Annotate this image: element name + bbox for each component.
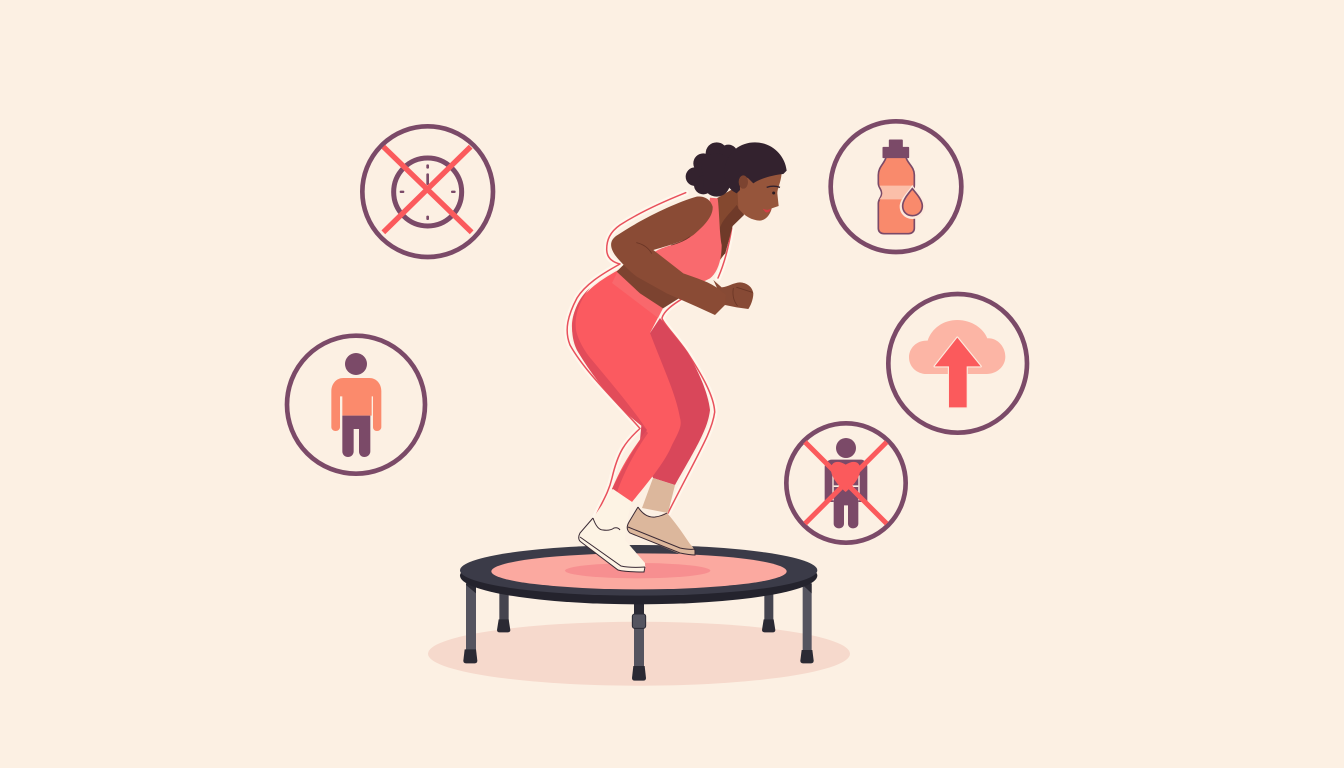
ear [739,175,748,189]
tan shoe [627,507,695,555]
mouth [763,209,771,213]
ring [287,336,425,474]
arm gaps [832,475,860,500]
clock ticks [400,164,456,220]
socks [593,478,675,540]
bun [686,142,738,197]
icon: person [287,336,425,474]
person [825,438,867,528]
clock face [394,158,462,226]
front leg pants [572,268,681,502]
water drop [900,185,925,219]
ring [786,423,906,543]
cloud [909,320,1005,374]
icon: no person [786,423,906,543]
trampoline [460,545,817,681]
up arrow [935,338,981,407]
torso highlight [831,462,860,492]
trousers [342,416,370,457]
waistband [612,268,663,318]
front legs [463,583,814,681]
cross [383,147,472,232]
crop top [655,198,722,285]
ring [888,294,1027,433]
frame rim [460,547,817,604]
icon: no clock [362,126,493,257]
face [737,173,782,221]
bottle cap [883,140,908,157]
eye and brow [767,186,780,194]
arm creases [637,237,752,306]
back leg pants [640,318,710,485]
icon: water bottle [831,121,961,252]
bottle body [878,157,914,234]
neck [717,187,745,260]
upper body in zoom coordinates [611,142,787,315]
neck shadow [719,205,744,257]
far fist [713,280,753,309]
ring [831,121,961,252]
icon: cloud with up arrow [888,294,1027,433]
ring [362,126,493,257]
back legs [497,590,775,632]
jump mat [491,553,787,589]
cross [805,442,887,524]
woman jumping [567,142,787,572]
arm [611,197,726,315]
motion outline [567,193,732,518]
white shoe [578,518,645,572]
hair [725,142,787,193]
head [345,353,367,375]
floor shadow [428,622,850,686]
shirt [331,378,381,431]
mat centre pad [565,563,710,578]
pants shading [572,288,647,430]
motion outline halo [567,193,732,518]
midriff [617,252,697,308]
bottle label band [879,186,913,199]
